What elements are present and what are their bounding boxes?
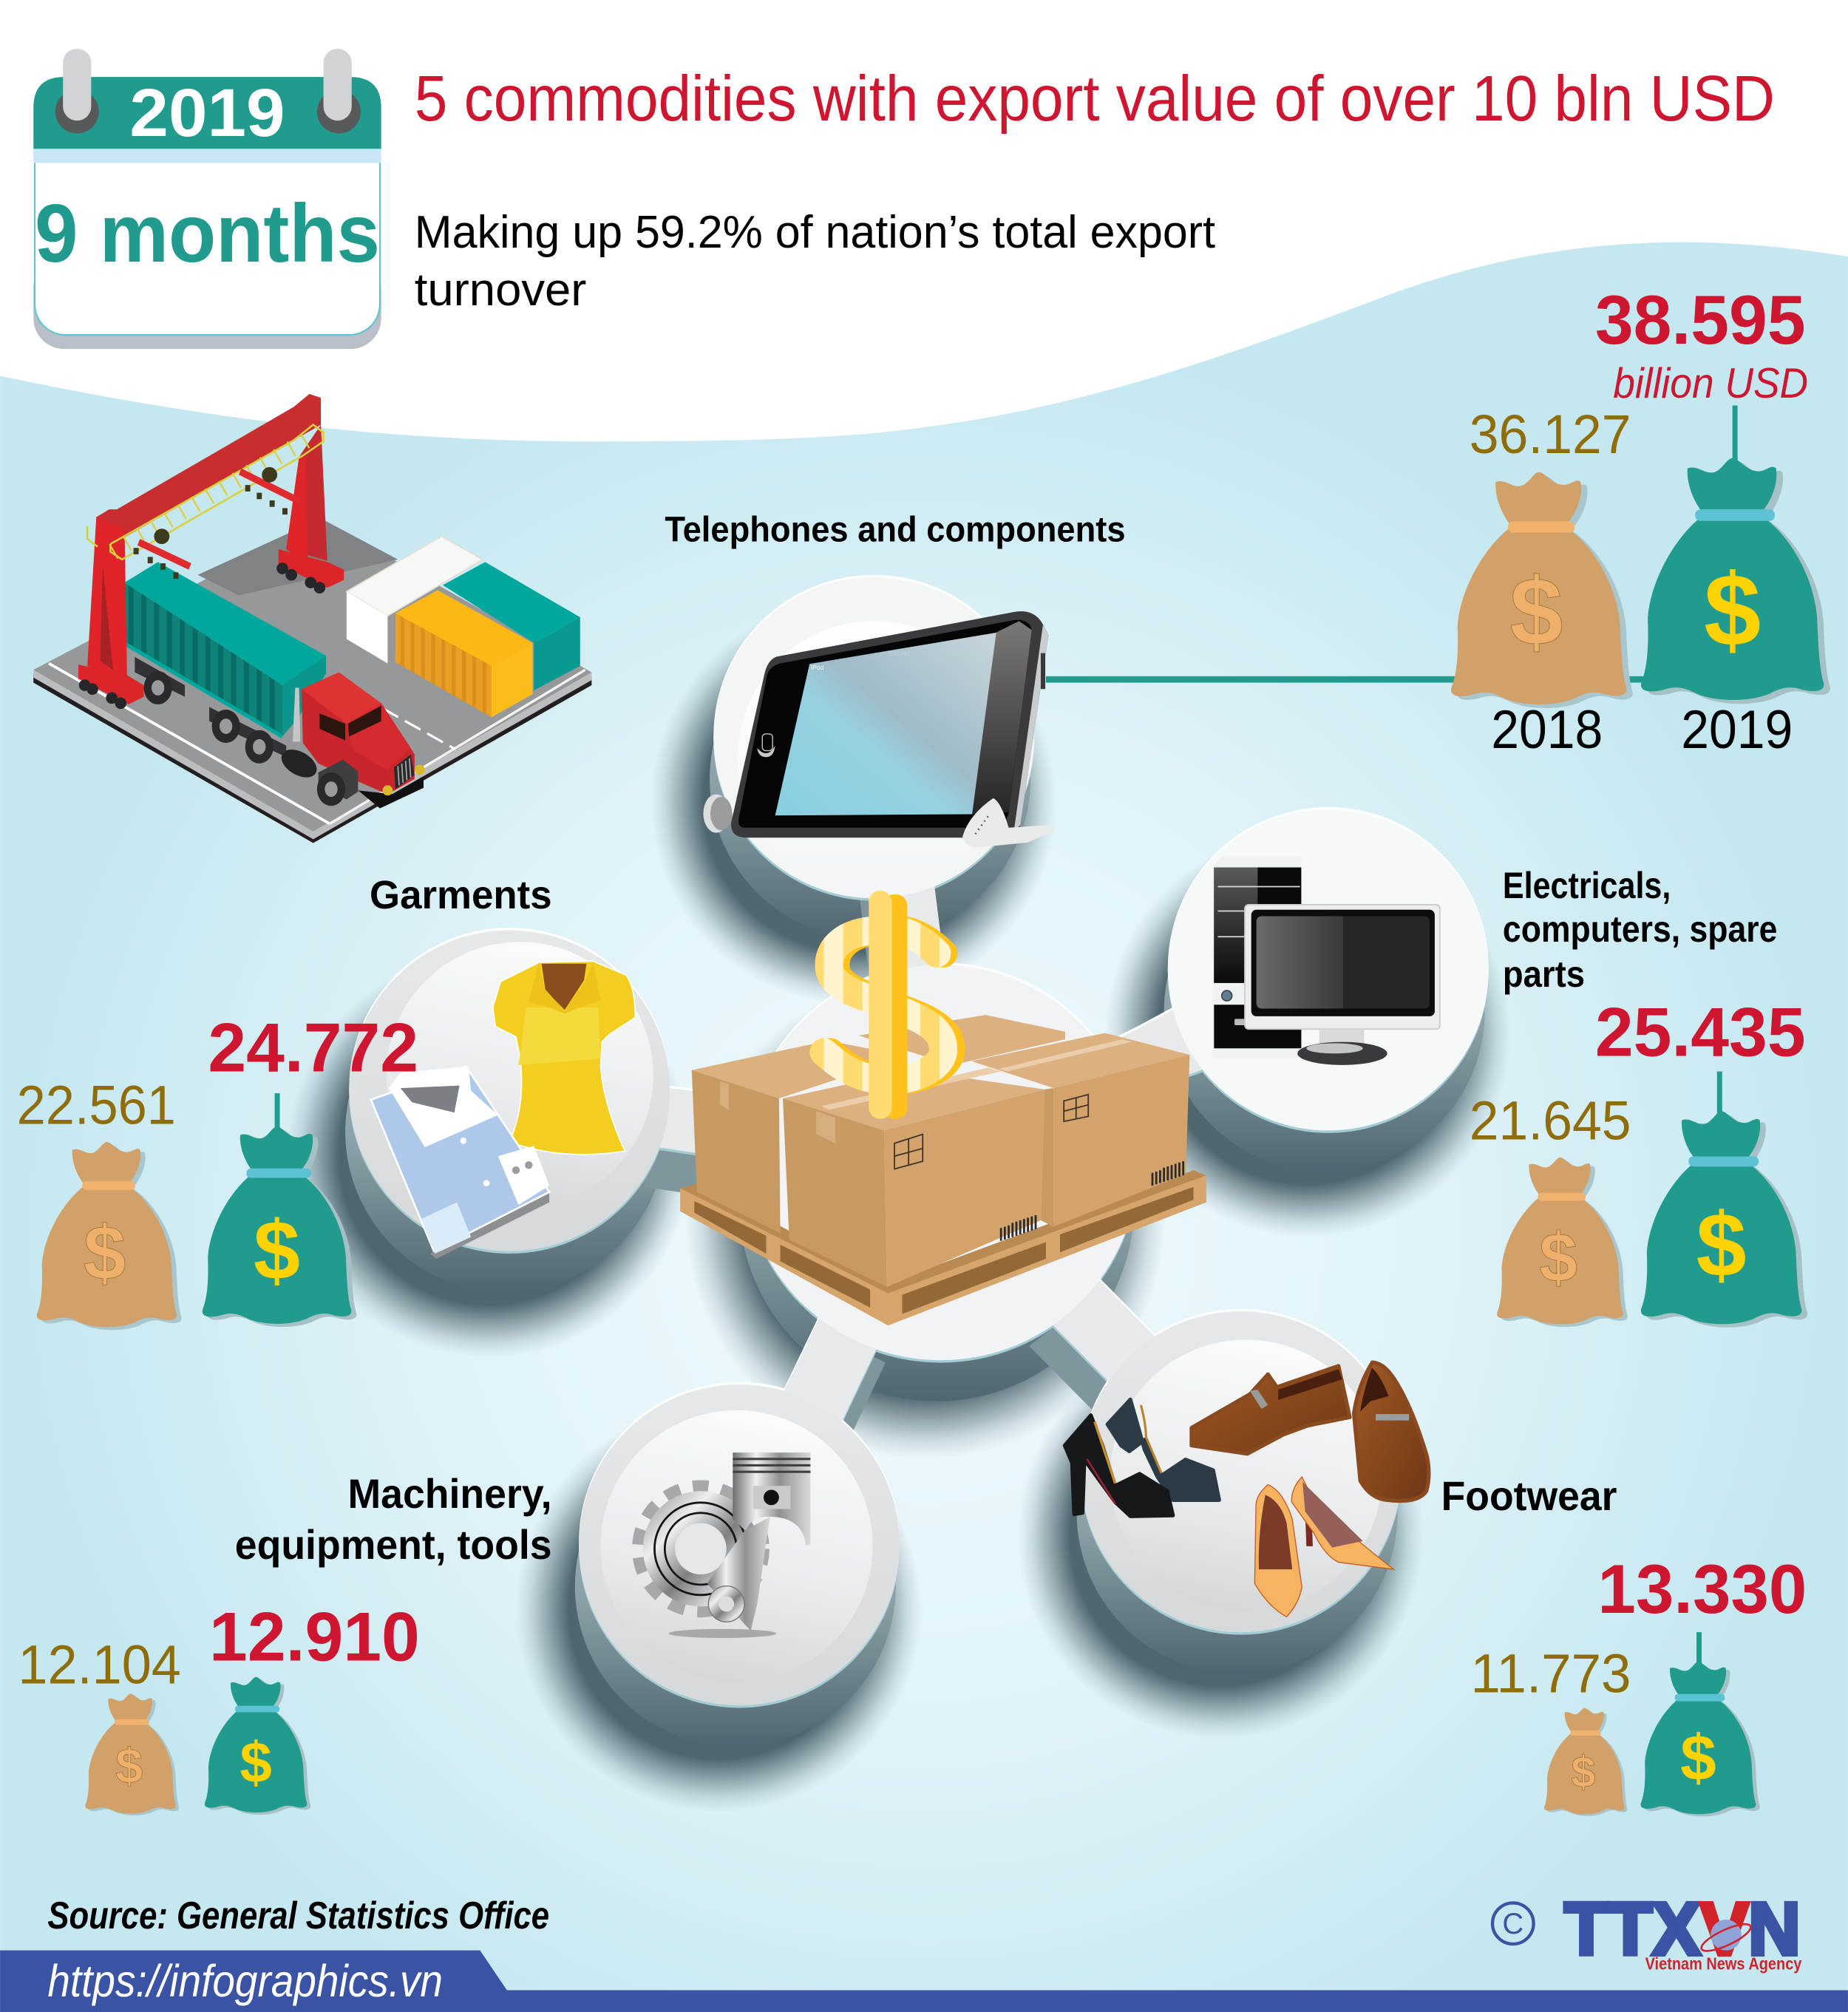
- subtitle: Making up 59.2% of nation’s total export: [415, 206, 1215, 258]
- money bag 2018: $: [1571, 1747, 1596, 1797]
- truck: [124, 562, 425, 809]
- crane hooks: [134, 467, 288, 579]
- calendar period: 9 months: [35, 187, 380, 279]
- logo wordmark: TTXVN: [1564, 1888, 1801, 1971]
- circle: machinery: [579, 1384, 900, 1705]
- earphones: [703, 795, 1056, 848]
- money bag 2018: $: [1509, 557, 1563, 665]
- money bag 2018: [1451, 472, 1633, 708]
- stem: [1696, 1632, 1702, 1667]
- icon: computer: [1213, 856, 1440, 1065]
- label: machinery: Machinery,: [348, 1471, 552, 1517]
- tablet screen labels: iPod: [811, 664, 824, 671]
- 2018 value: 21.645: [1470, 1090, 1631, 1152]
- icon: box pallet: [680, 1015, 1206, 1325]
- gear: [639, 1487, 762, 1611]
- money bag 2018: [37, 1142, 182, 1330]
- circle: centre: [743, 965, 1138, 1360]
- footer url: https://infographics.vn: [47, 1956, 443, 2006]
- right box: [971, 1033, 1189, 1088]
- calendar year: 2019: [129, 75, 285, 151]
- stem: [275, 1093, 280, 1132]
- circle: electricals: [1168, 809, 1489, 1130]
- circle: footwear: [1081, 1311, 1402, 1632]
- label: footwear: Footwear: [1441, 1473, 1617, 1519]
- money bag 2019: [205, 1677, 310, 1815]
- money bag 2018: [85, 1693, 179, 1815]
- 2019 value: 38.595: [1595, 281, 1806, 358]
- stem: [1717, 1072, 1722, 1115]
- money bag 2019: [1641, 458, 1830, 704]
- piston: [707, 1452, 810, 1631]
- computer monitor: [1245, 905, 1440, 1065]
- label: machinery: equipment, tools: [235, 1522, 552, 1568]
- icon: gear and piston: [639, 1452, 810, 1638]
- 2019 value: 24.772: [208, 1009, 418, 1087]
- electricals value block: [1470, 993, 1807, 1328]
- 2019 value: 25.435: [1595, 993, 1806, 1071]
- crane wheels: [79, 563, 325, 709]
- crane right leg: [286, 425, 327, 561]
- year 2018: 2018: [1491, 700, 1603, 760]
- 2018 value: 12.104: [18, 1634, 181, 1696]
- label: electricals: computers, spare: [1503, 908, 1777, 950]
- label: garments: Garments: [370, 873, 552, 917]
- connector line: telephones to bags: [1046, 676, 1644, 683]
- orange pumps: [1254, 1477, 1393, 1617]
- money bag 2018: $: [1539, 1219, 1577, 1296]
- crane beam: [96, 394, 321, 544]
- footwear value block: [1471, 1550, 1807, 1817]
- year 2019: 2019: [1681, 700, 1793, 760]
- subtitle: turnover: [415, 264, 586, 316]
- barcodes: [1001, 1161, 1183, 1241]
- crane: [78, 394, 344, 709]
- icon: shoes: [1064, 1362, 1429, 1617]
- calendar badge: [33, 49, 381, 349]
- copyright mark: C: [1502, 1908, 1523, 1940]
- money bag 2018: [1544, 1708, 1628, 1816]
- money bag 2019: $: [1680, 1722, 1716, 1794]
- yellow polo: [493, 961, 635, 1155]
- money bag 2019: [1641, 1111, 1807, 1328]
- telephones value block: [1451, 281, 1830, 760]
- money bag 2018: $: [115, 1739, 143, 1794]
- tablet home button: [757, 734, 775, 757]
- money bag 2019: $: [240, 1731, 272, 1795]
- money bag 2019: $: [254, 1204, 300, 1297]
- circle: garments: [349, 931, 670, 1251]
- crane left leg: [87, 517, 127, 679]
- logo globe: [1699, 1919, 1753, 1956]
- icon: shirts: [371, 961, 635, 1259]
- garments value block: [17, 1009, 418, 1330]
- money bag 2019: $: [1696, 1194, 1747, 1295]
- logo tagline: Vietnam News Agency: [1645, 1954, 1801, 1974]
- computer tower: [1213, 856, 1302, 1058]
- circle: telephones: [713, 577, 1034, 898]
- money bag 2018: [1497, 1158, 1628, 1327]
- left box: [692, 1041, 907, 1098]
- money bag 2019: $: [1704, 553, 1761, 667]
- hub extrusion: [345, 619, 1485, 1747]
- 2018 value: 36.127: [1470, 403, 1631, 465]
- 2018 value: 22.561: [17, 1074, 176, 1136]
- unit: billion USD: [1613, 360, 1808, 407]
- black heels: [1064, 1399, 1219, 1516]
- label: electricals: parts: [1503, 953, 1585, 995]
- label: electricals: Electricals,: [1503, 864, 1671, 906]
- icon: gold dollar sign: [824, 891, 951, 1119]
- title: 5 commodities with export value of over 10 bln USD: [415, 63, 1775, 135]
- source note: Source: General Statistics Office: [47, 1894, 549, 1937]
- 2018 value: 11.773: [1471, 1642, 1631, 1705]
- crane trolley bars: [137, 539, 191, 570]
- 2019 value: 12.910: [209, 1597, 420, 1675]
- money bag 2019: [203, 1126, 356, 1327]
- crane lattice: [87, 425, 324, 560]
- 2019 value: 13.330: [1597, 1550, 1807, 1628]
- brown loafers: [1192, 1362, 1429, 1501]
- logo: TTXVN: [1492, 1888, 1801, 1974]
- label: telephones: Telephones and components: [665, 510, 1126, 550]
- machinery value block: [18, 1597, 420, 1815]
- money bag 2019: [1641, 1662, 1760, 1817]
- tablet screen labels: [811, 650, 909, 671]
- footer band: [0, 1951, 1848, 2012]
- money bag 2018: $: [84, 1210, 126, 1296]
- rear box: [858, 1015, 1065, 1065]
- blue shirt: [371, 1067, 549, 1259]
- icon: tablet and earphones: [703, 611, 1056, 848]
- central hub diagram: [349, 575, 1489, 1708]
- copyright mark: [1492, 1903, 1534, 1944]
- stem: [1733, 406, 1738, 464]
- icon: package marks: [894, 1095, 1088, 1169]
- tablet screen labels: 9:42 AM: [888, 650, 909, 657]
- illustration: port with crane, truck and containers: [33, 394, 591, 843]
- main box: [783, 1070, 1044, 1130]
- containers: [347, 537, 580, 717]
- hub soft shadow: [286, 599, 1510, 1812]
